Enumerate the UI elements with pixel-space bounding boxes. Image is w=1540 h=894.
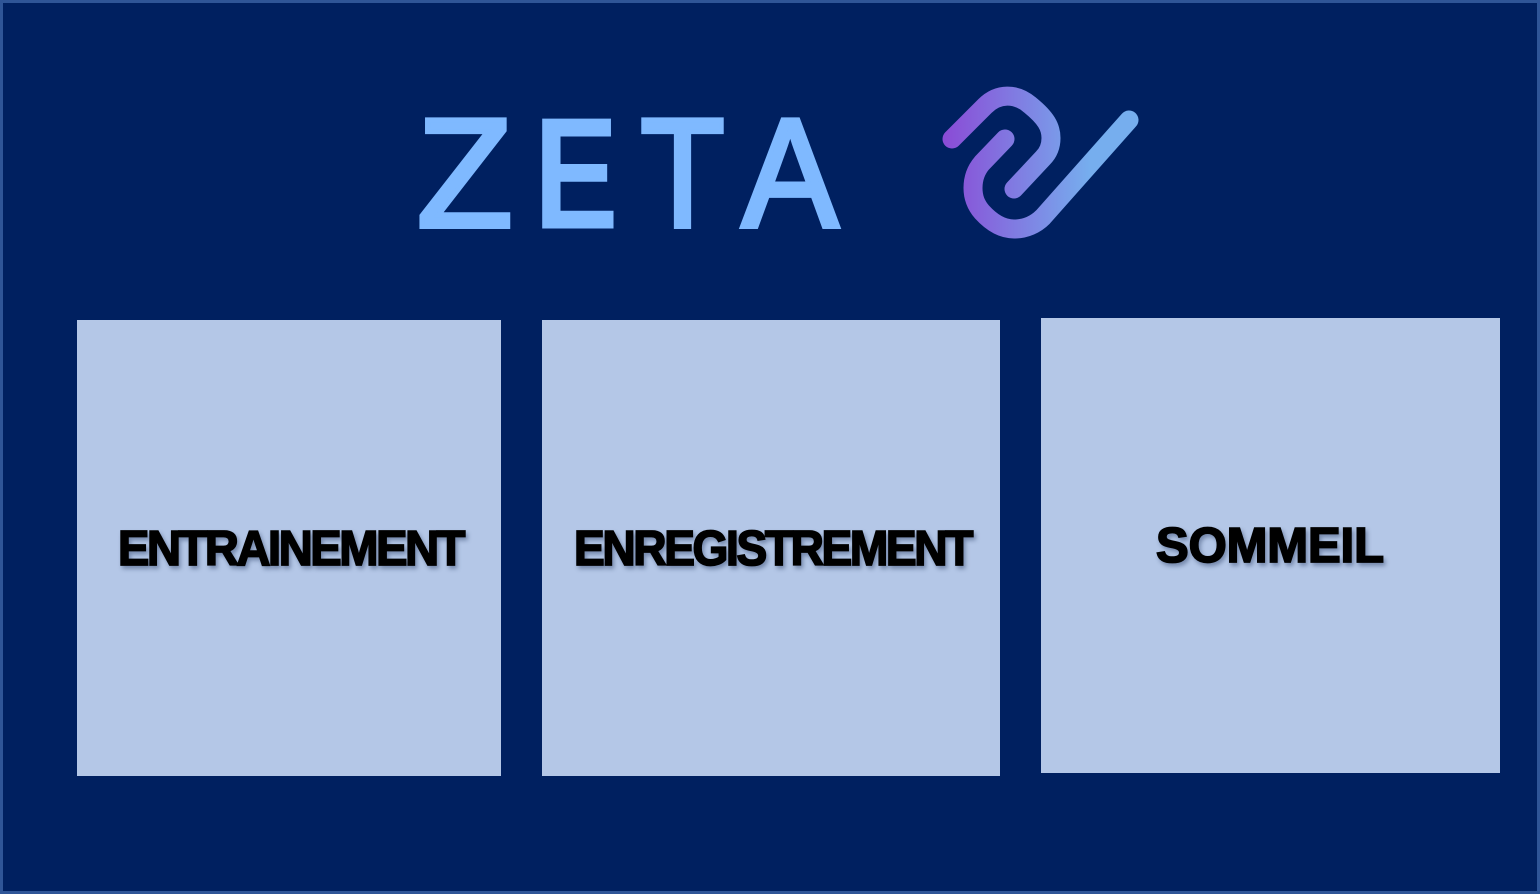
panel: enregistrement [542, 320, 1000, 776]
title: ZETA: A [742, 87, 838, 260]
icon: paperclip logo [952, 96, 1129, 229]
title: ZETA [417, 84, 838, 263]
title: ZETA: Z [417, 87, 513, 260]
panel: sommeil [1041, 318, 1500, 773]
label: entrainement: ENTRAINEMENT [118, 522, 465, 576]
label: enregistrement: ENREGISTREMENT [574, 522, 973, 576]
panel: entrainement [77, 320, 501, 776]
label: sommeil: SOMMEIL [1156, 519, 1384, 573]
title: ZETA: E [534, 84, 618, 263]
title: ZETA: T [640, 87, 725, 260]
